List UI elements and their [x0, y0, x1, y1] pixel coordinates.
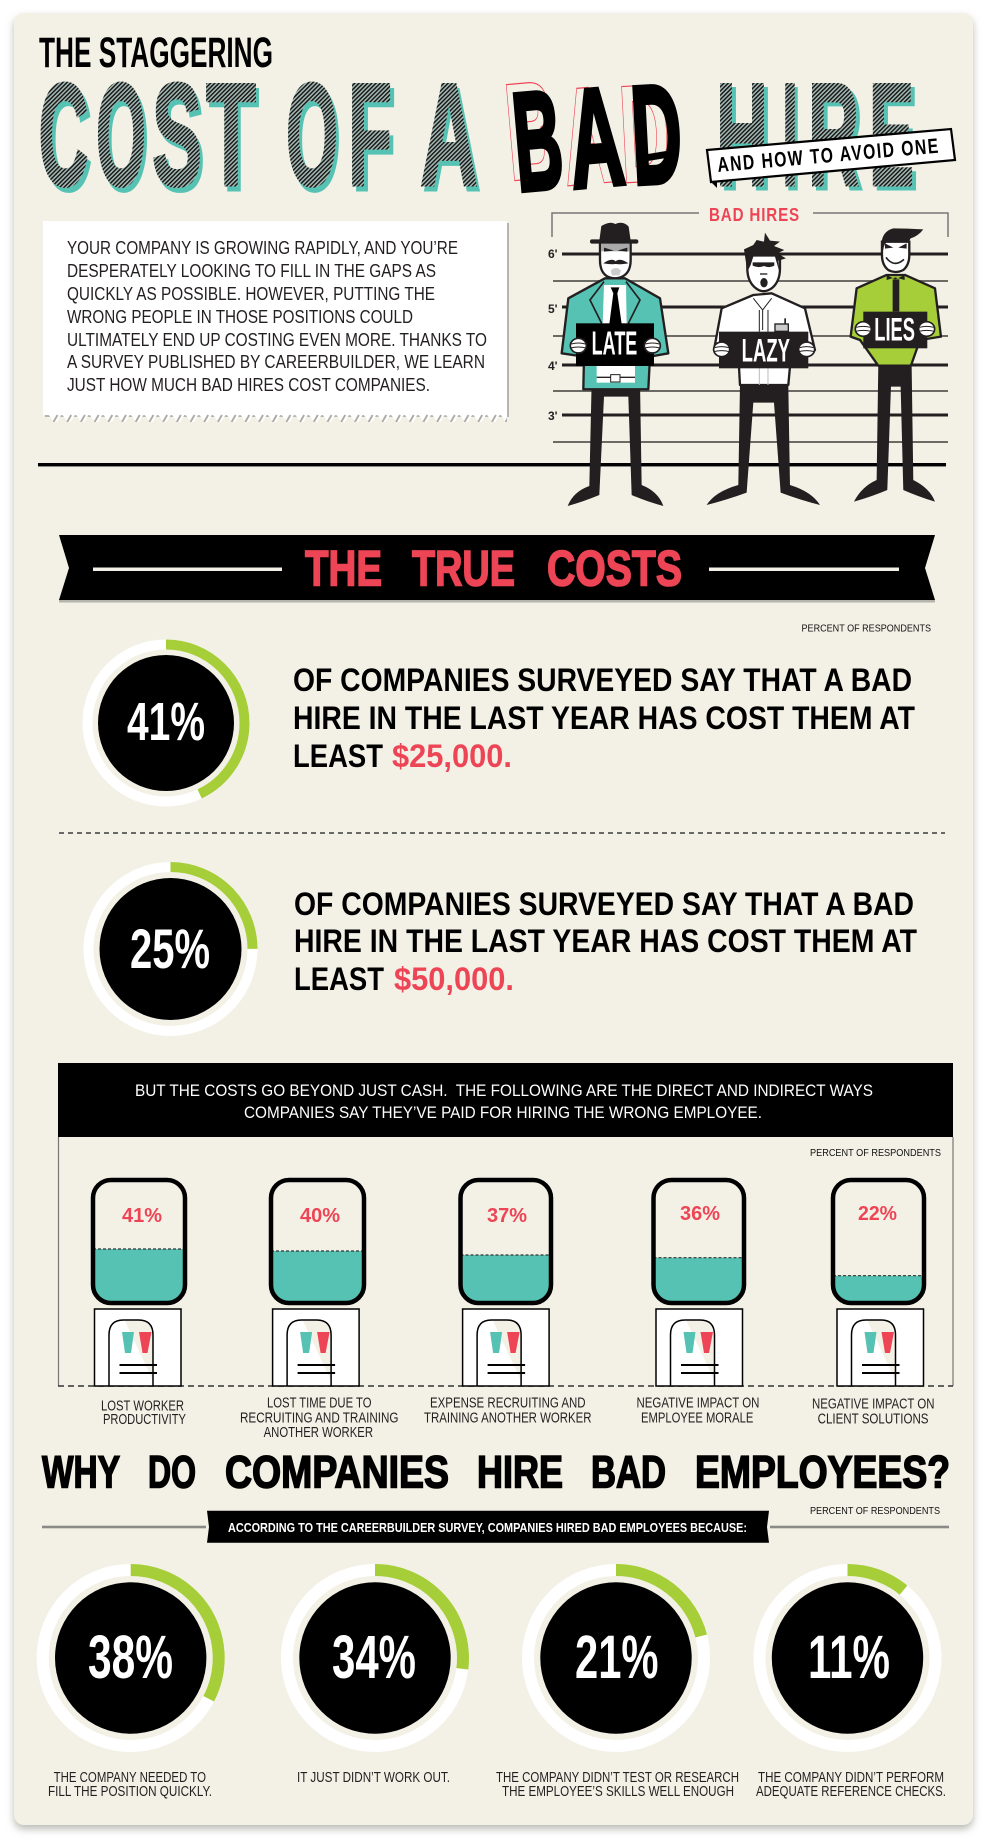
height lines: 4' [548, 359, 558, 373]
text: 41% statement: OF COMPANIES SURVEYED SAY THAT A BAD [293, 662, 912, 698]
figure: late: LATE [592, 326, 637, 363]
text: 41% statement: $25,000. [392, 738, 512, 774]
water cooler: 40% lost time: ANOTHER WORKER [264, 1425, 373, 1441]
stat: 21% didn't test skills [496, 1570, 739, 1800]
heading: cost of a: S [152, 53, 202, 216]
heading: why do companies hire bad employees: WHY [42, 1446, 120, 1498]
note: percent of respondents: PERCENT OF RESPONDENTS [810, 1147, 941, 1159]
water cooler: 40% lost time [240, 1180, 398, 1441]
water cooler: 41% lost worker productivity: 41% [122, 1205, 162, 1227]
height lines: 6' [548, 247, 558, 261]
baseline [58, 1385, 953, 1387]
stat: 21% didn't test skills: 21% [575, 1623, 658, 1691]
text block: intro card: ULTIMATELY END UP COSTING EVEN MORE. THANKS TO [67, 330, 487, 350]
text block: intro card: WRONG PEOPLE IN THOSE POSITIONS COULD [67, 307, 413, 327]
heading: why do companies hire bad employees [42, 1446, 950, 1498]
frame [58, 1137, 953, 1386]
stat: 38% needed to fill the position: THE COMPANY NEEDED TO [54, 1770, 206, 1786]
water cooler: 36% employee morale: 36% [680, 1203, 720, 1225]
text: 41% statement: LEAST [293, 738, 383, 774]
section banner: the true costs [59, 535, 935, 602]
heading: cost of a shadow: O [289, 58, 341, 221]
heading: hire: I [782, 53, 798, 216]
heading: bad: D [627, 55, 686, 214]
heading: cost of a shadow: C [42, 58, 92, 221]
heading: hire shadow [720, 57, 918, 220]
heading: cost of a [38, 53, 478, 216]
heading: the staggering: THE STAGGERING [39, 29, 273, 77]
text block: intro card [43, 221, 509, 422]
figure: lies [851, 228, 941, 502]
stat: 38% needed to fill the position [43, 1570, 219, 1800]
stat: 11% reference checks: 11% [808, 1623, 890, 1691]
panel: indirect costs chart [58, 1063, 953, 1441]
text: 25% statement: $50,000. [394, 961, 514, 997]
note: percent of respondents: PERCENT OF RESPONDENTS [802, 622, 931, 634]
figure: lazy: LAZY [742, 332, 790, 368]
text: 41% statement: HIRE IN THE LAST YEAR HAS COST THEM AT [293, 700, 915, 736]
sub-banner: according to careerbuilder: ACCORDING TO THE CAREERBUILDER SURVEY, COMPANIES HIRED BAD EMPLOYEES BECAUSE: [228, 1520, 747, 1535]
heading: why do companies hire bad employees: COMPANIES [225, 1446, 449, 1498]
water cooler: 36% employee morale [636, 1180, 759, 1427]
text: 25% statement [294, 886, 917, 997]
water cooler: 37% expense recruiting: EXPENSE RECRUITING AND [430, 1396, 586, 1412]
water cooler: 41% lost worker productivity: LOST WORKER [101, 1398, 184, 1414]
title: E [869, 53, 914, 216]
figure: late [562, 223, 668, 506]
heading: cost of a: C [38, 53, 88, 216]
stat: 11% reference checks [756, 1570, 946, 1800]
heading: cost of a: T [206, 53, 256, 216]
ribbon: and how to avoid one [707, 129, 955, 188]
figure: lies: LIES [874, 311, 915, 347]
heading: cost of a shadow: A [423, 58, 481, 221]
illustration: police lineup height chart [548, 205, 948, 506]
bad hires label: BAD HIRES [709, 205, 800, 225]
section banner: the true costs: TRUE [412, 540, 515, 596]
water cooler: 40% lost time: RECRUITING AND TRAINING [240, 1411, 398, 1427]
bad hires label [552, 205, 948, 237]
heading: bad [507, 55, 686, 221]
water cooler: 22% client solutions: NEGATIVE IMPACT ON [812, 1396, 934, 1412]
heading: cost of a: O [286, 53, 338, 216]
text: 25% statement: OF COMPANIES SURVEYED SAY THAT A BAD [294, 886, 914, 922]
water cooler: 22% client solutions [812, 1180, 934, 1428]
water cooler: 36% employee morale: NEGATIVE IMPACT ON [636, 1396, 759, 1412]
text block: intro card: YOUR COMPANY IS GROWING RAPIDLY, AND YOU’RE [67, 238, 458, 258]
stat: 21% didn't test skills: THE COMPANY DIDN’T TEST OR RESEARCH [496, 1770, 739, 1786]
height lines: 3' [548, 409, 558, 423]
heading: cost of a shadow: O [99, 58, 149, 221]
water cooler: 40% lost time: LOST TIME DUE TO [267, 1396, 372, 1412]
text block: intro card: QUICKLY AS POSSIBLE. HOWEVER, PUTTING THE [67, 284, 435, 304]
heading: hire shadow: R [812, 57, 863, 220]
water cooler: 41% lost worker productivity: PRODUCTIVITY [103, 1412, 186, 1428]
heading: bad red outline: D [615, 54, 674, 213]
heading: bad red outline: A [555, 55, 618, 216]
chart header: BUT THE COSTS GO BEYOND JUST CASH. THE FOLLOWING ARE THE DIRECT AND INDIRECT WAYS [135, 1081, 873, 1100]
water cooler: 37% expense recruiting: 37% [487, 1205, 527, 1227]
text block: intro card: JUST HOW MUCH BAD HIRES COST COMPANIES. [67, 375, 430, 395]
heading: bad: B [507, 60, 568, 221]
stat: 34% didn't work out: 34% [332, 1623, 416, 1691]
heading: why do companies hire bad employees: HIRE [477, 1446, 563, 1498]
water cooler: 36% employee morale: EMPLOYEE MORALE [641, 1411, 754, 1427]
heading: hire: R [808, 53, 859, 216]
heading: cost of a shadow: F [352, 58, 396, 221]
stat: 25% circle [88, 867, 252, 1031]
water cooler: 22% client solutions: CLIENT SOLUTIONS [818, 1412, 928, 1428]
divider [59, 832, 945, 834]
heading: why do companies hire bad employees: DO [148, 1446, 196, 1498]
title: E [873, 57, 918, 220]
water cooler: 41% lost worker productivity [93, 1180, 186, 1428]
heading: bad red outline [499, 50, 674, 216]
figure: lazy [707, 233, 820, 505]
stat: 25% circle: 25% [130, 917, 210, 980]
heading: hire shadow: I [785, 57, 801, 220]
heading: hire: H [716, 53, 768, 216]
heading: why do companies hire bad employees: BAD [591, 1446, 666, 1498]
section banner: the true costs: THE [305, 540, 382, 596]
heading: cost of a shadow: T [209, 58, 259, 221]
text block: intro card: DESPERATELY LOOKING TO FILL IN THE GAPS AS [67, 261, 436, 281]
heading: hire [716, 53, 914, 216]
stat: 41% circle [88, 644, 244, 802]
heading: hire shadow: H [720, 57, 772, 220]
text block: intro card: A SURVEY PUBLISHED BY CAREERBUILDER, WE LEARN [67, 352, 485, 372]
text: 25% statement: LEAST [294, 961, 384, 997]
stat: 11% reference checks: THE COMPANY DIDN’T PERFORM [758, 1770, 944, 1786]
stat: 34% didn't work out [287, 1570, 463, 1786]
chart header [58, 1063, 953, 1137]
stat: 21% didn't test skills: THE EMPLOYEE’S SKILLS WELL ENOUGH [502, 1784, 734, 1800]
stat: 41% circle: 41% [127, 692, 205, 752]
water cooler: 40% lost time: 40% [300, 1205, 340, 1227]
heading: cost of a: F [348, 53, 392, 216]
water cooler: 37% expense recruiting [424, 1180, 592, 1427]
water cooler: 37% expense recruiting: TRAINING ANOTHER WORKER [424, 1411, 592, 1427]
heading: bad slot bar [648, 150, 672, 161]
note: percent of respondents: PERCENT OF RESPONDENTS [810, 1505, 940, 1517]
heading: cost of a shadow [42, 58, 481, 221]
heading: bad: A [562, 57, 629, 218]
height lines [548, 247, 948, 443]
stat: 38% needed to fill the position: 38% [88, 1623, 173, 1691]
heading: bad red outline: B [499, 50, 562, 211]
ground line [38, 463, 946, 467]
title [38, 29, 955, 221]
height lines: 5' [548, 302, 558, 316]
chart header: COMPANIES SAY THEY’VE PAID FOR HIRING THE WRONG EMPLOYEE. [244, 1103, 762, 1122]
heading: cost of a: A [420, 53, 478, 216]
water cooler: 22% client solutions: 22% [858, 1203, 897, 1225]
text: 25% statement: HIRE IN THE LAST YEAR HAS COST THEM AT [294, 923, 917, 959]
stat: 34% didn't work out: IT JUST DIDN’T WORK OUT. [297, 1770, 450, 1786]
section banner: the true costs: COSTS [547, 540, 682, 596]
heading: cost of a: O [96, 53, 146, 216]
text: 41% statement [293, 662, 915, 774]
sub-banner: according to careerbuilder [42, 1511, 949, 1543]
heading: cost of a shadow: S [155, 58, 205, 221]
stat: 38% needed to fill the position: FILL THE POSITION QUICKLY. [48, 1784, 212, 1800]
